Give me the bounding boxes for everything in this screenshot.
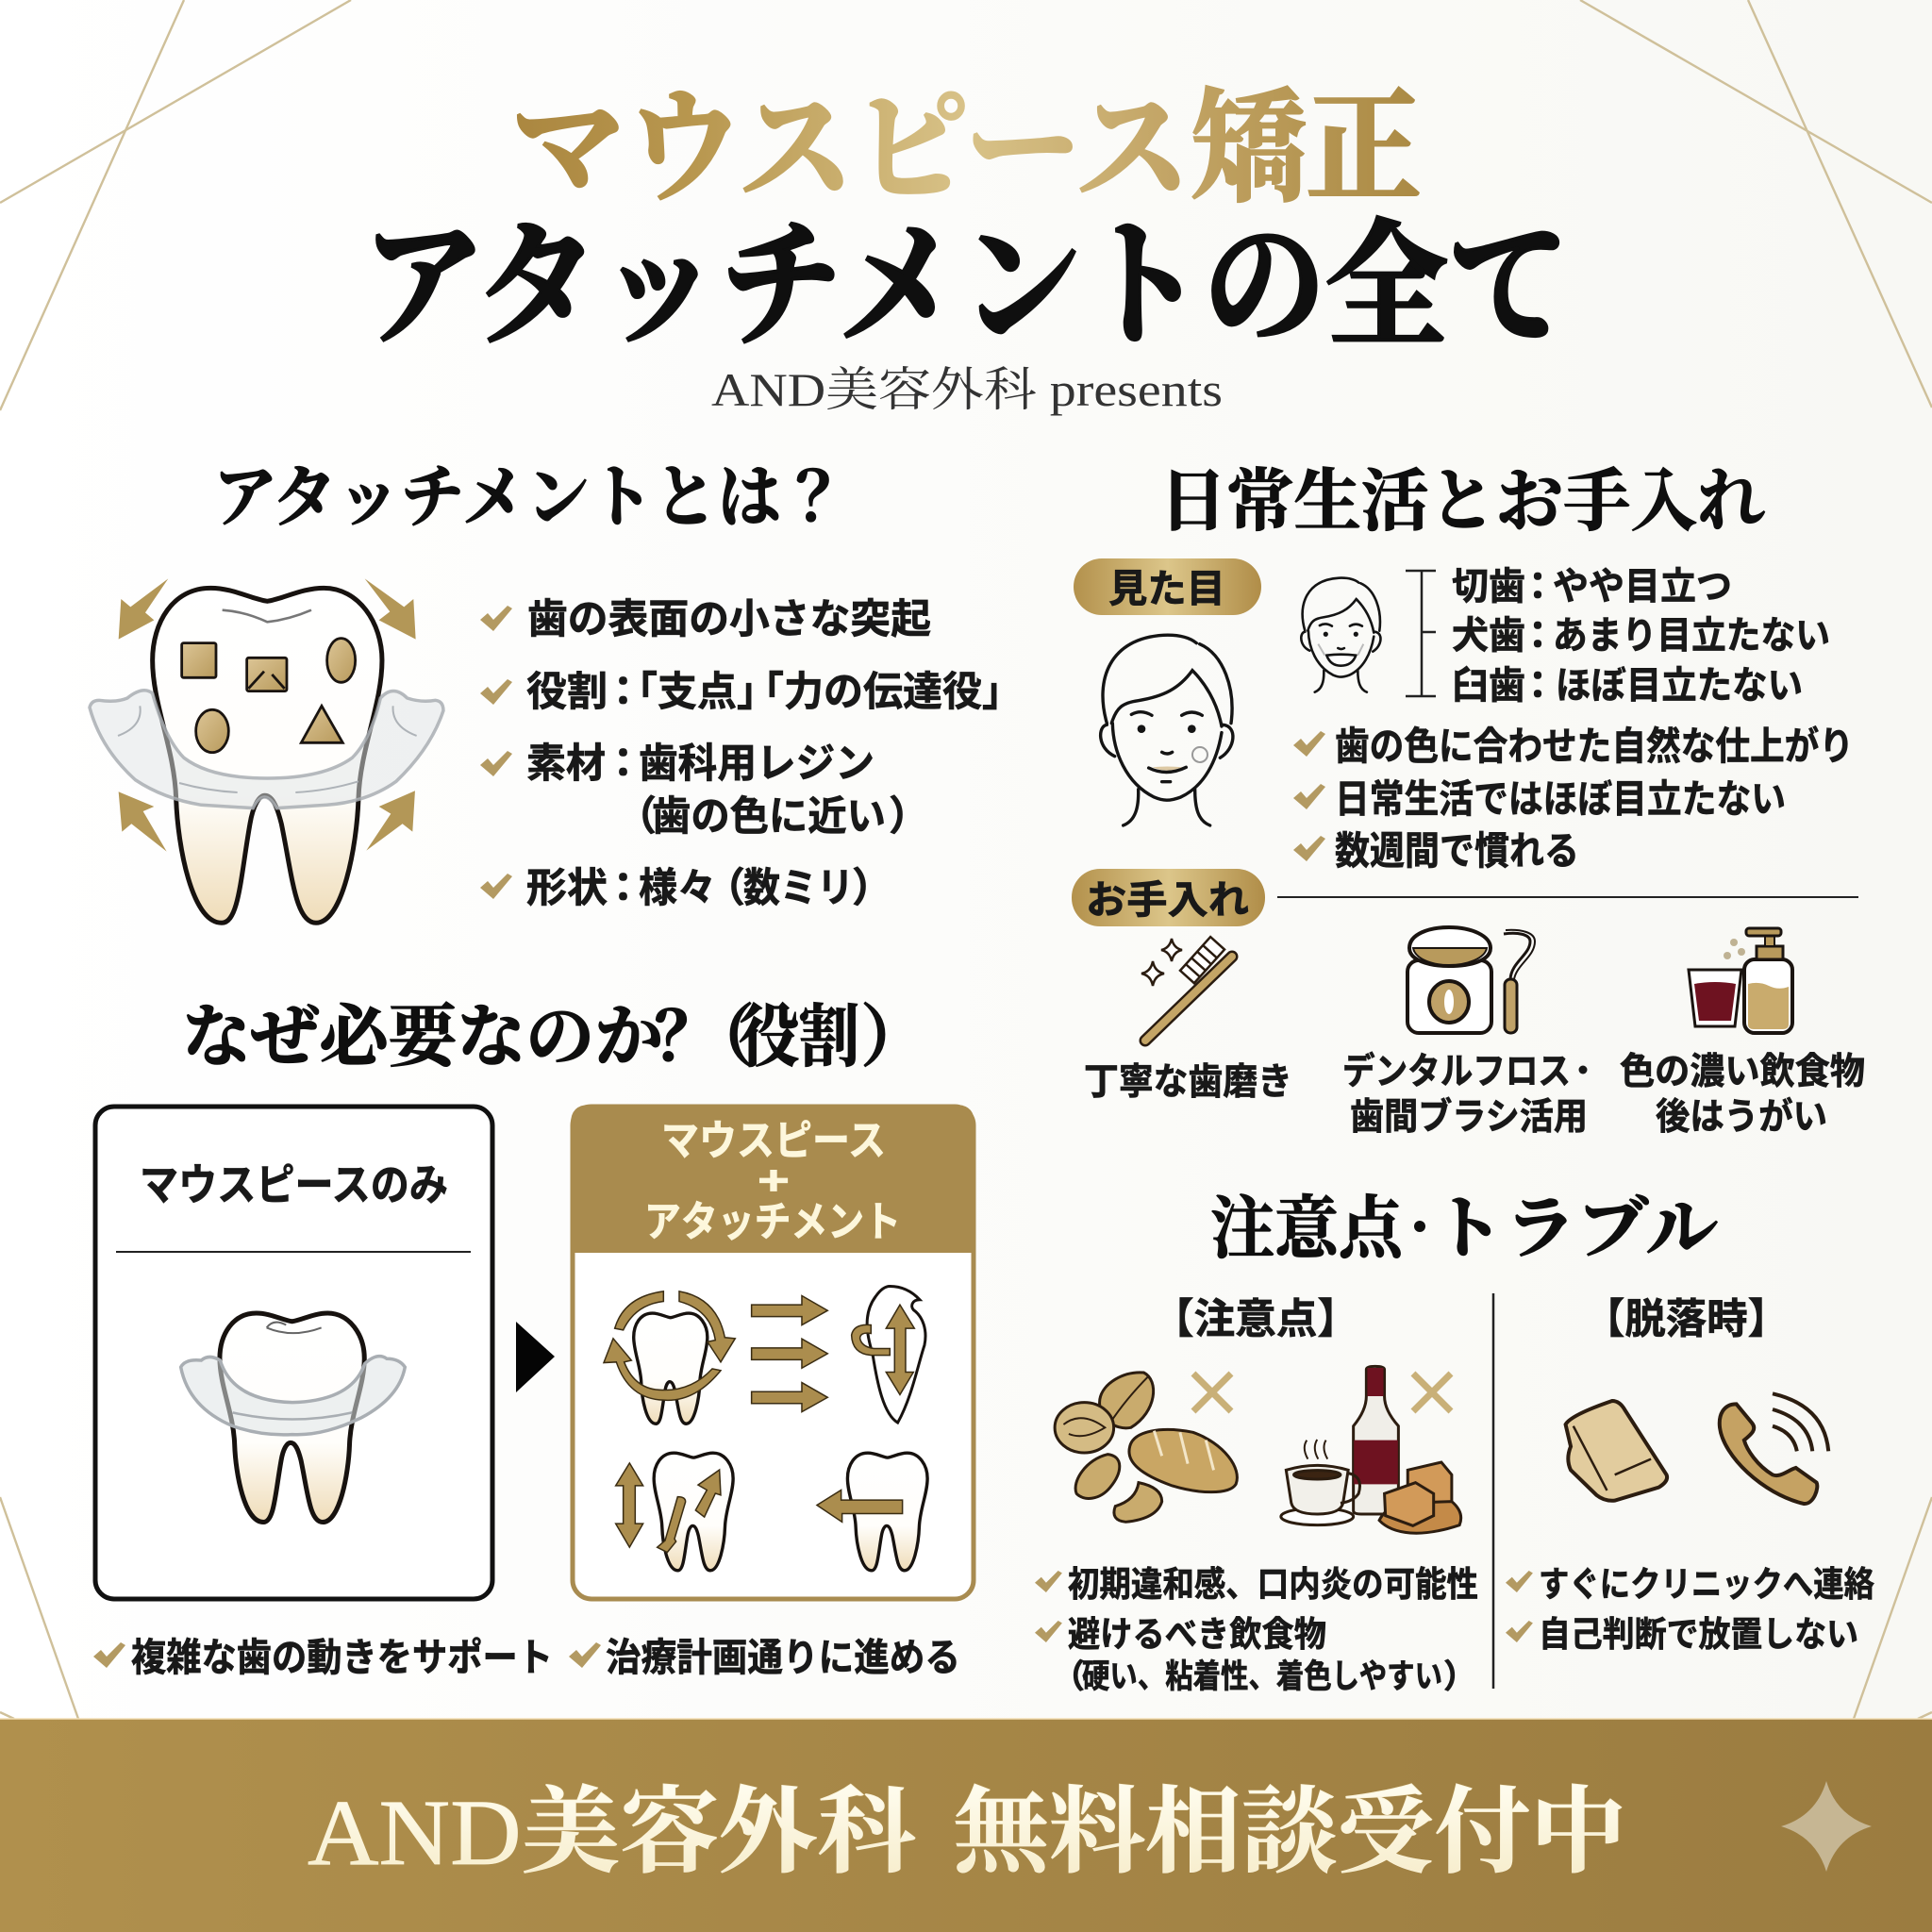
- icon: cross mark: [1193, 1374, 1231, 1411]
- heading: what is attachment: アタッチメントとは？: [213, 460, 845, 536]
- footer banner: AND美容外科: [308, 1780, 916, 1885]
- icon: fallen attachment: [1566, 1401, 1667, 1501]
- pill: care: [1072, 869, 1265, 926]
- icon: hard foods: [1055, 1373, 1237, 1522]
- checklist: what is attachment: ：: [603, 741, 643, 787]
- icon: phone: [1720, 1393, 1828, 1504]
- subheading: cautions: 【注意点】: [1153, 1296, 1358, 1342]
- heading: daily life and care: 日常生活とお手入れ: [1159, 464, 1765, 540]
- heading: why needed: 役割: [739, 1000, 859, 1075]
- icon: dark drink and mouthwash: [1689, 928, 1792, 1033]
- visibility list by tooth type: あまり目立たない: [1553, 615, 1830, 657]
- care labels: デンタルフロス: [1342, 1051, 1571, 1092]
- checklist: what is attachment: （: [616, 794, 657, 840]
- presenter line: AND美容外科 presents: [711, 363, 1223, 416]
- checklist: appearance: 日常生活ではほぼ目立たない: [1335, 777, 1786, 821]
- checklist: cautions: 初期違和感、口内炎の可能性: [1068, 1565, 1478, 1604]
- icon: smiling face: [1301, 578, 1380, 692]
- checklist: what is attachment: （: [705, 866, 745, 911]
- panel: mouthpiece plus attachment: マウスピース: [661, 1118, 886, 1164]
- icon: tooth with tray: [181, 1313, 405, 1523]
- checklist: if it falls off: 自己判断で放置しない: [1539, 1615, 1858, 1654]
- checklist: benefits of attachment: [93, 1636, 960, 1679]
- panel: mouthpiece plus attachment: +: [758, 1158, 790, 1204]
- checklist: if it falls off: [1506, 1565, 1874, 1654]
- heading: cautions and trouble: トラブル: [1432, 1191, 1718, 1267]
- care labels: 後はうがい: [1656, 1097, 1827, 1138]
- checklist: cautions: 硬い、粘着性、着色しやすい: [1082, 1658, 1442, 1695]
- icon: dental floss and interdental brush: [1407, 927, 1535, 1033]
- visibility list by tooth type: 切歯: [1452, 566, 1525, 608]
- visibility list by tooth type: 臼歯: [1452, 665, 1525, 707]
- heading: why needed: ）: [860, 1000, 928, 1075]
- checklist: cautions: 避けるべき飲食物: [1068, 1615, 1326, 1654]
- visibility list by tooth type: ：: [1519, 615, 1557, 657]
- checklist: what is attachment: ：: [603, 670, 643, 715]
- icon: cross mark: [1413, 1374, 1451, 1411]
- checklist: what is attachment: 形状: [526, 866, 608, 911]
- checklist: what is attachment: ）: [889, 794, 929, 840]
- pill: care: お手入れ: [1086, 878, 1249, 922]
- heading: why needed: [182, 1000, 928, 1075]
- heading: why needed: なぜ必要なのか: [182, 1000, 663, 1075]
- pill: appearance: 見た目: [1108, 567, 1225, 610]
- visibility list by tooth type: やや目立つ: [1553, 566, 1732, 608]
- care labels: [1084, 1051, 1865, 1138]
- subheading: if it falls off: 【脱落時】: [1584, 1296, 1789, 1342]
- footer banner: [0, 1719, 1932, 1932]
- visibility list by tooth type: ほぼ目立たない: [1556, 665, 1803, 707]
- icon: sparkle: [1781, 1781, 1872, 1872]
- visibility list by tooth type: [1452, 566, 1830, 707]
- checklist: what is attachment: 役割: [526, 670, 608, 715]
- visibility list by tooth type: ：: [1519, 566, 1557, 608]
- title: gold line: マウスピース矯正: [510, 82, 1422, 218]
- checklist: benefits of attachment: 複雑な歯の動きをサポート: [131, 1636, 553, 1679]
- checklist: cautions: [1035, 1565, 1478, 1695]
- panel: mouthpiece plus attachment: アタッチメント: [644, 1199, 901, 1245]
- panel: mouthpiece only: マウスピースのみ: [140, 1160, 448, 1209]
- care labels: 歯間ブラシ活用: [1350, 1096, 1588, 1138]
- footer banner: 無料相談受付中: [953, 1780, 1626, 1885]
- visibility list by tooth type: 犬歯: [1452, 615, 1525, 657]
- checklist: what is attachment: 歯の表面の小さな突起: [527, 597, 931, 642]
- checklist: what is attachment: 「力の伝達役」: [744, 670, 1022, 715]
- checklist: benefits of attachment: 治療計画通りに進める: [606, 1636, 960, 1679]
- checklist: appearance: 数週間で慣れる: [1335, 829, 1579, 873]
- panel: mouthpiece only: [95, 1107, 492, 1599]
- checklist: what is attachment: 数ミリ: [743, 866, 854, 911]
- checklist: what is attachment: ）: [852, 866, 892, 911]
- icon: toothbrush: [1141, 937, 1232, 1041]
- heading: cautions and trouble: 注意点: [1210, 1191, 1407, 1267]
- icons: tooth movement types: [604, 1286, 927, 1571]
- checklist: what is attachment: 歯科用レジン: [639, 741, 874, 787]
- icon: coffee, wine and caramel: [1281, 1366, 1461, 1533]
- panel: mouthpiece plus attachment: [571, 1105, 974, 1599]
- checklist: what is attachment: 素材: [526, 741, 606, 787]
- heading: cautions and trouble: [1210, 1191, 1718, 1267]
- care labels: 丁寧な歯磨き: [1084, 1062, 1292, 1103]
- checklist: what is attachment: 「支点」: [618, 670, 776, 715]
- icon: face: [1101, 635, 1233, 825]
- checklist: what is attachment: ：: [603, 866, 643, 911]
- checklist: appearance: [1293, 724, 1854, 873]
- checklist: what is attachment: [480, 597, 1022, 911]
- checklist: appearance: 歯の色に合わせた自然な仕上がり: [1335, 724, 1854, 768]
- bracket: [1406, 571, 1436, 696]
- visibility list by tooth type: ：: [1519, 665, 1557, 707]
- checklist: cautions: ）: [1443, 1658, 1476, 1695]
- care labels: 色の濃い飲食物: [1620, 1052, 1865, 1092]
- title: black line: アタッチメントの全て: [362, 212, 1570, 363]
- heading: why needed: ？: [655, 1000, 723, 1075]
- checklist: cautions: （: [1052, 1658, 1085, 1695]
- illustration: tooth with attachments and tray: [90, 578, 443, 923]
- heading: why needed: （: [687, 1000, 755, 1075]
- checklist: what is attachment: 歯の色に近い: [652, 794, 886, 840]
- checklist: what is attachment: 様々: [639, 866, 716, 911]
- pill: appearance: [1074, 558, 1261, 615]
- arrow: to combined panel: [516, 1322, 555, 1392]
- checklist: if it falls off: すぐにクリニックへ連絡: [1539, 1565, 1874, 1604]
